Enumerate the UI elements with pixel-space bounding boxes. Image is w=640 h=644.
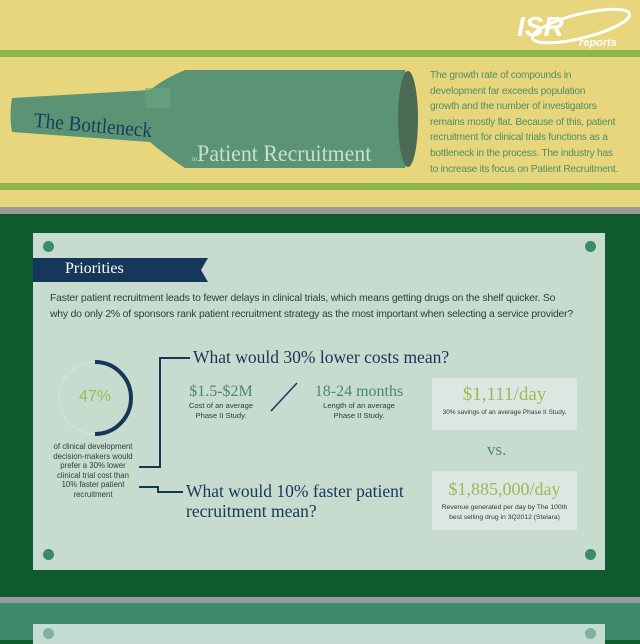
intro text <box>430 70 618 175</box>
caption: prefer a 30% lower <box>60 461 126 470</box>
question 1: What would 30% lower costs mean? <box>193 347 449 367</box>
intro text: recruitment for clinical trials functions as a <box>430 132 608 143</box>
donut chart 47%: 47% <box>79 388 111 405</box>
box: revenue: best selling drug in 3Q2012 (Stelara) <box>449 514 560 520</box>
stat: length: Phase II Study. <box>334 411 384 420</box>
caption: 10% faster patient <box>62 480 124 489</box>
box: revenue: $1,885,000/day <box>448 479 560 499</box>
lower band <box>0 603 640 640</box>
subtitle: inPatient Recruitment <box>192 141 371 166</box>
heading banner <box>33 258 208 282</box>
caption: of clinical development <box>54 442 132 451</box>
stat: length: Length of an average <box>323 401 395 410</box>
next panel <box>33 624 605 644</box>
bracket connectors <box>139 357 298 493</box>
caption <box>53 442 133 499</box>
question 2 <box>186 481 404 521</box>
bottle title: The Bottleneck <box>33 108 153 142</box>
logo: reports <box>579 37 617 49</box>
stat: cost: $1.5-$2M <box>189 383 253 400</box>
donut chart 47% <box>58 360 133 436</box>
vs: vs. <box>487 440 506 459</box>
intro text: to increase its focus on Patient Recruitment. <box>430 164 618 175</box>
stat: cost <box>189 383 253 420</box>
intro paragraph <box>50 293 573 320</box>
caption: clinical trial cost than <box>57 471 129 480</box>
stat: length: 18-24 months <box>315 383 403 400</box>
box: savings: 30% savings of an average Phase II Study. <box>443 409 566 416</box>
intro paragraph: Faster patient recruitment leads to fewer delays in clinical trials, which means getting drugs on the shelf quicker. So <box>50 293 555 304</box>
intro text: bottleneck in the process. The industry has <box>430 148 613 159</box>
intro text: development far exceeds population <box>430 86 585 97</box>
intro text: remains mostly flat. Because of this, patient <box>430 117 615 128</box>
logo: ISR <box>517 11 564 42</box>
panel: priorities <box>33 233 605 570</box>
header band <box>0 0 640 207</box>
question 2: What would 10% faster patient <box>186 481 404 501</box>
box: revenue: Revenue generated per day by The 100th <box>442 504 567 511</box>
logo <box>517 8 632 49</box>
stat: cost: Cost of an average <box>189 401 253 410</box>
caption: decision-makers would <box>53 452 133 461</box>
caption: recruitment <box>74 490 112 499</box>
bottle illustration <box>10 70 418 168</box>
box: revenue <box>432 471 577 530</box>
intro text: The growth rate of compounds in <box>430 70 571 81</box>
heading banner: Priorities <box>65 260 124 277</box>
stat: cost: Phase II Study. <box>196 411 246 420</box>
intro text: growth and the number of investigators <box>430 101 597 112</box>
stat: length <box>315 383 403 420</box>
question 2: recruitment mean? <box>186 501 317 521</box>
intro paragraph: why do only 2% of sponsors rank patient recruitment strategy as the most important when selecting a service provider? <box>50 309 573 320</box>
box: savings: $1,111/day <box>463 384 546 405</box>
box: savings <box>432 378 577 430</box>
